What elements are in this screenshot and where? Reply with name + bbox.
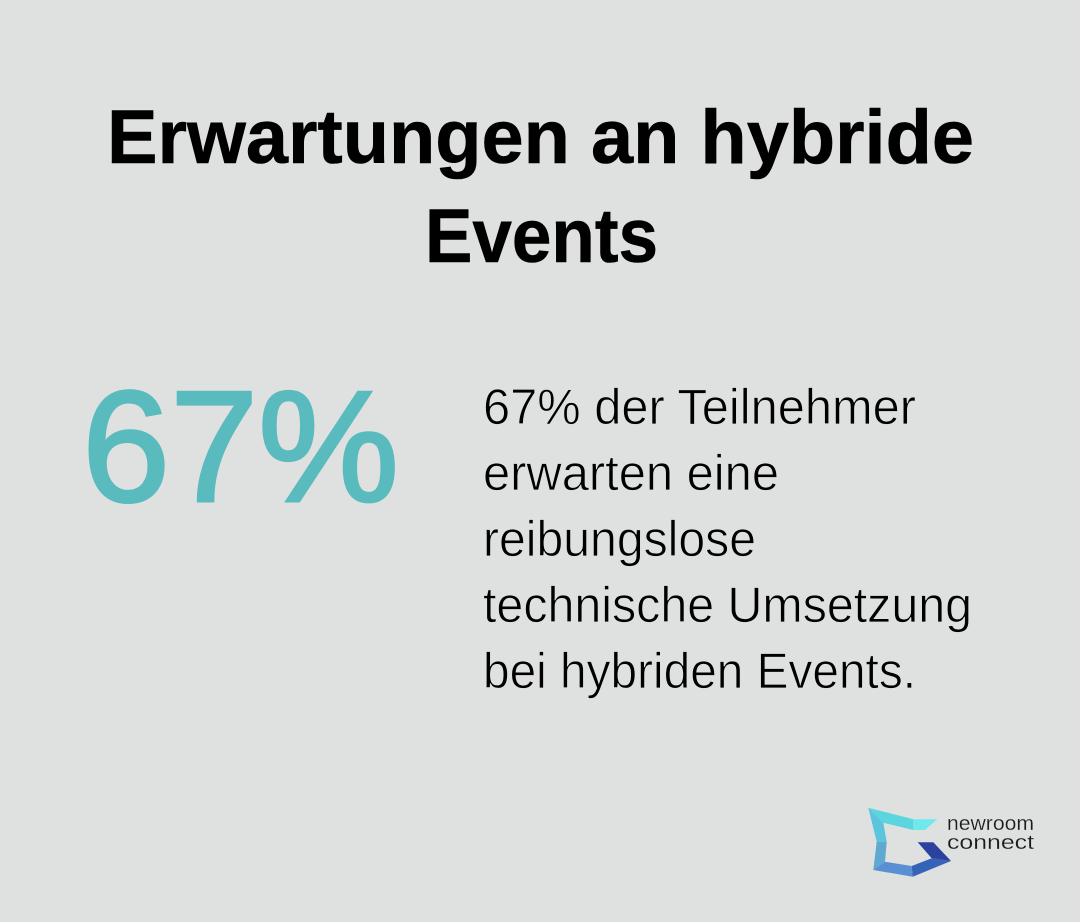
description text: technische Umsetzung [483, 577, 972, 633]
big statistic: 67%: 67% [82, 359, 399, 535]
description text: erwarten eine [483, 445, 779, 501]
title: Erwartungen an hybride [107, 95, 974, 180]
logo wordmark: connect [947, 832, 1035, 854]
description text: bei hybriden Events. [483, 643, 916, 699]
logo wordmark: newroom [947, 813, 1034, 835]
logo wordmark [947, 813, 1035, 854]
description text: reibungslose [483, 511, 756, 567]
title [107, 95, 974, 279]
description text [483, 379, 972, 699]
icon: logo mark [868, 808, 951, 877]
logo: newroom connect [868, 808, 1035, 877]
title: Events [425, 194, 658, 279]
description text: 67% der Teilnehmer [483, 379, 916, 435]
